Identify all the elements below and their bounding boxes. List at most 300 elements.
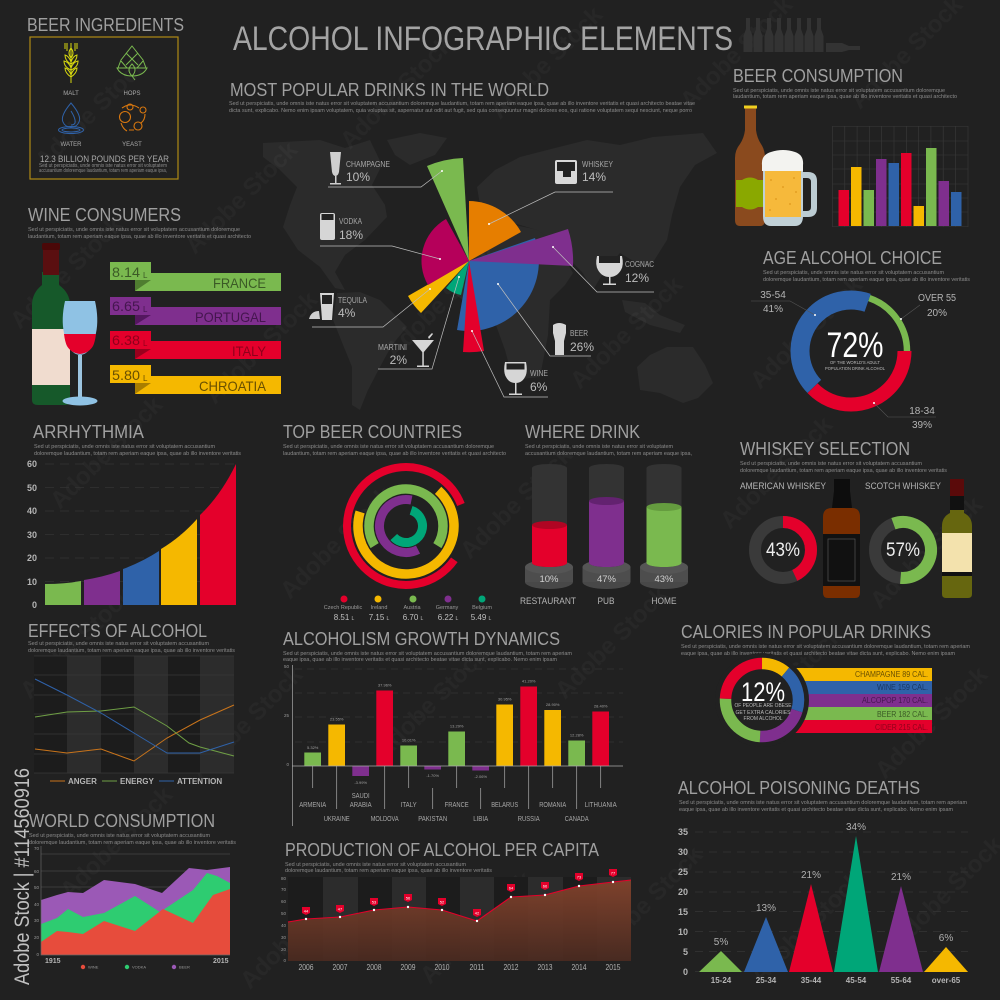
faint stock watermark pattern: Adobe Stock — [335, 31, 458, 154]
body text: Sed ut perspiciatis, unde omnis iste natus error sit voluptatem — [39, 163, 167, 169]
ribbon: france: 8.14 — [112, 264, 140, 280]
area chart: 70 — [281, 887, 286, 892]
donut chart — [779, 279, 923, 423]
heading: calories: CALORIES IN POPULAR DRINKS — [681, 622, 931, 642]
faint stock watermark pattern: Adobe Stock — [55, 781, 178, 904]
area chart: 44 — [304, 908, 309, 914]
label: martini — [378, 343, 407, 367]
icon: bottle silhouettes — [744, 18, 860, 52]
triangle chart: 15 — [678, 907, 688, 917]
icon: beer bottle — [735, 106, 765, 226]
ribbon: chroatia: CHROATIA — [199, 378, 267, 394]
bar chart: -3.99% — [354, 780, 367, 785]
bar chart: 23.55% — [330, 716, 344, 722]
bar chart: ARMENIA — [299, 800, 326, 809]
triangle chart: 45-54 — [846, 976, 867, 985]
faint stock watermark pattern: Adobe Stock — [725, 621, 848, 744]
area chart: 60 — [281, 899, 286, 904]
body text: Sed ut perspiciatis, unde omnis iste natus error sit voluptatem accusantium doloremque laudantium, totam rem aperiam — [679, 800, 967, 806]
icon: beer mug — [762, 150, 817, 226]
faint stock watermark pattern: Adobe Stock — [745, 866, 868, 989]
panel: age alcohol choice — [751, 248, 970, 431]
body text: Sed ut perspiciatis, unde omnis iste natus error sit voluptatem accusantium — [763, 270, 944, 276]
icon: water drop — [58, 103, 84, 134]
triangle chart: 55-64 — [891, 976, 912, 985]
bar chart: PAKISTAN — [418, 814, 447, 823]
ribbon: italy: 6.38 — [112, 332, 140, 348]
cylinder: home: HOME — [652, 596, 676, 606]
bar chart: -1.70% — [426, 773, 439, 778]
faint stock watermark pattern: Adobe Stock — [415, 866, 538, 989]
legend: WINE — [88, 964, 99, 970]
icon: martini — [412, 333, 434, 367]
area chart: 56 — [406, 896, 411, 900]
triangle chart: 5 — [683, 947, 688, 957]
icon: beer glass — [553, 323, 566, 355]
label: whiskey — [582, 160, 614, 184]
area chart: 2012 — [504, 963, 519, 972]
chart: curved bars — [45, 464, 236, 605]
area chart: 50 — [281, 911, 286, 916]
body text: Sed ut perspiciatis, unde omnis iste natus error sit voluptatem accusantium — [28, 641, 209, 647]
body text: dicta sunt, explicabo. Nemo enim ipsam voluptatem, quia voluptas sit, aspernatur aut odit aut fugit, sed quia consequuntur magni dolores eos, qui ratione voluptatem sequi nesciunt, neque porro — [229, 108, 692, 114]
body text: Sed ut perspiciatis, unde omnis iste natus error sit voluptatem accusantium doloremque laudantium, totam rem aperiam eaque ipsa, quae ab illo inventore veritatis et quasi architecto beatae vitae — [229, 101, 695, 107]
icon: tequila — [309, 293, 334, 320]
panel: world consumption — [29, 811, 236, 970]
donut: american whiskey — [755, 522, 811, 578]
label: wine — [530, 369, 548, 394]
faint stock watermark pattern: Adobe Stock — [200, 286, 323, 409]
faint stock watermark pattern: Adobe Stock — [235, 871, 358, 994]
bar chart: 12.28% — [570, 732, 584, 738]
triangle chart: 20 — [678, 887, 688, 897]
triangle chart: over-65 — [932, 976, 961, 985]
triangle chart: 10 — [678, 927, 688, 937]
icon: champagne — [330, 152, 341, 184]
legend: austria: Austria — [403, 605, 421, 611]
area chart: 2014 — [572, 963, 587, 972]
heading: where drink: WHERE DRINK — [525, 422, 640, 442]
label: over 55: 20% — [927, 308, 947, 319]
label: american whiskey: AMERICAN WHISKEY — [740, 481, 826, 491]
caption: POPULATION DRINK ALCOHOL — [825, 366, 885, 371]
faint stock watermark pattern: Adobe Stock — [565, 271, 688, 394]
body text: Sed ut perspiciatis, unde omnis iste natus error sit voluptatem accusantium — [34, 444, 215, 450]
label: whiskey: 14% — [582, 170, 606, 184]
icon: wine glass — [62, 301, 98, 406]
ribbon: chroatia — [110, 365, 281, 394]
bar chart: RUSSIA — [518, 814, 540, 823]
faint stock watermark pattern: Adobe Stock — [185, 661, 308, 784]
body text: eaque ipsa, quae ab illo inventore veritatis et quasi architecto beatae vitae dicta sunt, explicabo. Nemo enim ipsam — [681, 651, 955, 657]
body text: Sed ut perspiciatis, unde omnis iste natus error sit voluptatem accusantium — [740, 461, 922, 467]
y axis labels: 0 — [32, 600, 37, 610]
body text: Sed ut perspiciatis, unde omnis iste natus error sit voluptatem — [525, 444, 673, 450]
faint stock watermark pattern: Adobe Stock — [870, 661, 993, 784]
legend: VODKA — [132, 964, 146, 970]
area chart — [281, 869, 631, 972]
legend: austria: 6.70 L — [403, 613, 424, 622]
bar chart: 5.32% — [307, 745, 319, 750]
calorie bars: CHAMPAGNE 89 CAL. — [855, 669, 928, 679]
y axis labels: 40 — [27, 506, 37, 516]
label: hops: HOPS — [123, 91, 141, 97]
bar chart: UKRAINE — [324, 814, 350, 823]
center stat: 12% — [741, 677, 785, 707]
legend — [81, 964, 190, 970]
triangle chart: 25 — [678, 867, 688, 877]
stacked area chart: 70 — [34, 846, 39, 851]
label: water: WATER — [60, 142, 82, 148]
donut chart — [711, 649, 813, 751]
label: beer — [570, 329, 594, 354]
panel: arrhythmia — [27, 422, 241, 610]
center stat: 72% — [826, 326, 884, 365]
area chart: 20 — [281, 947, 286, 952]
stacked area chart: 2015 — [213, 958, 229, 965]
stacked area chart: 30 — [34, 918, 39, 923]
bar chart: -2.06% — [474, 774, 487, 779]
label: cognac: COGNAC — [625, 260, 654, 269]
area chart: 2013 — [538, 963, 553, 972]
body text: Sed ut perspiciatis, unde omnis iste natus error sit voluptatem accusantium doloremque laudantium, totam rem aperiam — [681, 644, 970, 650]
triangle chart: 25-34 — [756, 976, 777, 985]
donut: scotch whiskey: 57% — [886, 540, 920, 561]
triangle chart — [678, 822, 968, 985]
label: vodka — [339, 217, 363, 242]
label: champagne: 10% — [346, 170, 370, 184]
faint stock watermark pattern: Adobe Stock — [370, 641, 493, 764]
area chart: 47 — [338, 906, 343, 912]
faint stock watermark pattern: Adobe Stock — [180, 136, 303, 259]
body text: doloremque laudantium, totam rem aperiam eaque ipsa, quae ab illo inventore veritatis — [740, 468, 947, 474]
donut: american whiskey: 43% — [766, 540, 800, 561]
area chart: 53 — [372, 900, 377, 904]
ribbon: italy: L — [143, 339, 148, 348]
label: 18-34: 39% — [912, 420, 932, 431]
icon: vodka — [320, 213, 335, 240]
bar chart: 30.95% — [498, 696, 512, 702]
area chart: 52 — [440, 900, 445, 904]
heading: top beer countries: TOP BEER COUNTRIES — [283, 422, 462, 442]
triangle chart: 13% — [756, 903, 776, 914]
legend: ENERGY — [120, 777, 154, 786]
body text: eaque ipsa, quae ab illo inventore veritatis et quasi architecto beatae vitae dicta sunt, explicabo. Nemo enim ipsam — [679, 807, 953, 813]
label: beer: BEER — [570, 329, 588, 338]
label: tequila: TEQUILA — [338, 296, 368, 305]
triangle chart: 21% — [801, 870, 821, 881]
cylinder: home — [640, 464, 688, 606]
bar chart: 28.40% — [594, 704, 608, 708]
icon: wine bottle — [32, 243, 70, 405]
label: wine: WINE — [530, 369, 548, 378]
y axis labels: 60 — [27, 459, 37, 469]
heading: production per capita: PRODUCTION OF ALCOHOL PER CAPITA — [285, 840, 599, 860]
rose chart — [408, 158, 573, 352]
bar chart: LITHUANIA — [585, 800, 617, 809]
stacked area chart: 1915 — [45, 958, 61, 965]
label: 18-34: 18-34 — [909, 406, 935, 417]
radial rings — [324, 444, 488, 608]
faint stock watermark pattern: Adobe Stock — [45, 391, 168, 514]
panel: where drink — [520, 422, 692, 606]
stacked area chart: 20 — [34, 935, 39, 940]
stat: billion pounds: 12.3 BILLION POUNDS PER YEAR — [40, 154, 169, 164]
icon: yeast — [120, 104, 146, 131]
ribbon: portugal: PORTUGAL — [195, 309, 266, 325]
bar chart: CANADA — [565, 814, 589, 823]
body text: Sed ut perspiciatis, unde omnis iste natus error sit voluptatem accusantium — [285, 862, 466, 868]
faint stock watermark pattern: Adobe Stock — [455, 441, 578, 564]
callout lines — [751, 301, 936, 417]
faint stock watermark pattern: Adobe Stock — [275, 481, 398, 604]
stacked area chart: 50 — [34, 885, 39, 890]
area chart: 2007 — [332, 963, 348, 972]
cylinder: pub — [582, 464, 630, 606]
legend: germany: Germany — [436, 605, 459, 611]
panel: alcoholism growth dynamics — [283, 629, 623, 826]
stacked area chart — [34, 846, 230, 965]
world map — [263, 133, 717, 410]
calorie bars: BEER 182 CAL. — [877, 709, 928, 719]
label: martini: 2% — [390, 353, 407, 367]
bar chart: ARABIA — [350, 800, 372, 809]
y axis labels: 20 — [27, 553, 37, 563]
leader lines — [312, 170, 654, 397]
heading: beer consumption: BEER CONSUMPTION — [733, 66, 903, 86]
heading: whiskey selection: WHISKEY SELECTION — [740, 439, 910, 459]
triangle chart: 30 — [678, 847, 688, 857]
faint stock watermark pattern: Adobe Stock — [30, 51, 153, 174]
label: wine: 6% — [530, 380, 548, 394]
label: beer: 26% — [570, 340, 594, 354]
triangle chart: 0 — [683, 967, 688, 977]
legend: BEER — [179, 964, 190, 970]
bar chart: 0 — [286, 762, 289, 767]
icon: american whiskey bottle — [823, 479, 860, 598]
label: 35-54: 35-54 — [760, 290, 786, 301]
label: whiskey: WHISKEY — [582, 160, 614, 169]
area chart: 2010 — [434, 963, 450, 972]
heading: growth dynamics: ALCOHOLISM GROWTH DYNAMICS — [283, 629, 560, 649]
ribbon: france: L — [143, 271, 148, 280]
caption: FROM ALCOHOL — [744, 716, 783, 722]
body text: eaque ipsa, quae ab illo inventore veritatis et quasi architecto beatae vitae dicta sunt, explicabo. Nemo enim ipsam — [283, 657, 557, 663]
area chart: 30 — [281, 935, 286, 940]
legend: belgium: 5.49 L — [471, 613, 492, 622]
body text: Sed ut perspiciatis, unde omnis iste natus error sit voluptatem accusantium doloremque — [283, 444, 494, 450]
body text: doloremque laudantium, totam rem aperiam eaque ipsa, quae ab illo inventore veritatis — [34, 451, 241, 457]
label: over 55: OVER 55 — [918, 293, 956, 304]
cylinder: restaurant: 10% — [539, 574, 559, 585]
calorie bars — [780, 668, 932, 733]
calorie bars: CIDER 215 CAL. — [875, 722, 928, 732]
cylinder: pub: PUB — [598, 596, 614, 606]
cylinder: pub: 47% — [597, 574, 617, 585]
calorie bars: ALCOPOP 170 CAL. — [862, 695, 928, 705]
body text: Sed ut perspiciatis, unde omnis iste natus error sit voluptatem accusantium — [29, 833, 210, 839]
heading: wine consumers: WINE CONSUMERS — [28, 205, 181, 225]
label: vodka: VODKA — [339, 217, 363, 226]
label: 35-54: 41% — [763, 304, 783, 315]
bar chart: FRANCE — [445, 800, 469, 809]
stacked area chart: 0 — [36, 952, 39, 957]
label: 35-54 — [760, 290, 786, 315]
panel: beer ingredients — [27, 15, 184, 179]
body text: Sed ut perspiciatis, unde omnis iste natus error sit voluptatem accusantium doloremque — [28, 227, 240, 233]
legend: belgium — [471, 596, 492, 622]
y axis labels: 30 — [27, 530, 37, 540]
y axis labels: 50 — [27, 483, 37, 493]
body text: doloremque laudantium, totam rem aperiam eaque ipsa, quae ab illo inventore veritatis — [28, 648, 235, 654]
heading: age alcohol choice: AGE ALCOHOL CHOICE — [763, 248, 942, 268]
faint stock watermark pattern: Adobe Stock — [15, 581, 138, 704]
label: over 55 — [918, 293, 956, 319]
panel: whiskey selection — [740, 439, 972, 598]
bar chart: MOLDOVA — [371, 814, 399, 823]
ribbon: portugal — [110, 297, 281, 325]
bar chart: ROMANIA — [539, 800, 566, 809]
heading: effects of alcohol: EFFECTS OF ALCOHOL — [28, 621, 207, 641]
faint stock watermark pattern: Adobe Stock — [485, 1, 608, 124]
bar chart: 41.20% — [522, 678, 536, 684]
legend: ireland: Ireland — [371, 605, 387, 611]
bar chart: SAUDI — [352, 791, 370, 800]
label: scotch whiskey: SCOTCH WHISKEY — [865, 481, 941, 491]
area chart: 2011 — [470, 963, 485, 972]
triangle chart: 5% — [714, 937, 728, 948]
label: 18-34 — [909, 406, 935, 431]
line chart — [34, 656, 234, 773]
panel: effects of alcohol — [28, 621, 235, 786]
label: cognac — [625, 260, 654, 285]
panel: production per capita — [281, 840, 631, 972]
heading: arrhythmia: ARRHYTHMIA — [33, 422, 144, 442]
body text: laudantium, totam rem aperiam eaque ipsa, quae ab illo inventore veritatis et quasi architecto — [28, 234, 251, 240]
icon: cognac — [596, 256, 623, 285]
stock id watermark: Adobe Stock | #114560916 — [11, 768, 34, 985]
label: vodka: 18% — [339, 228, 363, 242]
legend: ANGER — [68, 777, 97, 786]
bar chart: 10.01% — [402, 738, 416, 742]
body text: Sed ut perspiciatis, unde omnis iste natus error sit voluptatem accusantium doloremque — [733, 88, 945, 94]
y axis labels: 10 — [27, 577, 37, 587]
body text: doloremque laudantium, totam rem aperiam eaque ipsa, quae ab illo inventore veritatis — [285, 868, 492, 874]
bar chart: LIBIA — [473, 814, 488, 823]
main title: ALCOHOL INFOGRAPHIC ELEMENTS — [233, 20, 733, 58]
stacked area chart: 60 — [34, 869, 39, 874]
area chart: 42 — [475, 910, 480, 916]
heading: poisoning deaths: ALCOHOL POISONING DEATHS — [678, 778, 920, 798]
legend: ATTENTION — [177, 777, 222, 786]
y axis labels — [27, 459, 37, 610]
legend: czech republic: Czech Republic — [324, 605, 363, 611]
triangle chart: 21% — [891, 872, 911, 883]
ribbon: italy: ITALY — [232, 343, 267, 359]
panel: beer consumption — [733, 66, 968, 227]
area chart: 0 — [283, 958, 286, 963]
body text: doloremque laudantium, totam rem aperiam eaque ipsa, quae ab illo inventore veritatis — [29, 840, 236, 846]
ingredients frame — [30, 37, 178, 179]
body text: laudantium, totam rem aperiam eaque ipsa, quae ab illo inventore veritatis et quasi architecto — [733, 94, 957, 100]
legend: ireland: 7.15 L — [369, 613, 390, 622]
ribbon: portugal: L — [143, 305, 148, 314]
triangle chart: 15-24 — [711, 976, 732, 985]
heading: world consumption: WORLD CONSUMPTION — [29, 811, 215, 831]
icon: malt — [64, 43, 78, 83]
label: champagne — [346, 160, 390, 184]
ribbon: chroatia: 5.80 — [112, 367, 140, 383]
label: tequila — [338, 296, 368, 320]
bar chart — [284, 664, 623, 826]
legend: germany: 6.22 L — [438, 613, 459, 622]
heading: most popular drinks: MOST POPULAR DRINKS IN THE WORLD — [230, 80, 549, 100]
ribbon: italy — [110, 331, 281, 359]
area chart: 77 — [611, 870, 616, 876]
triangle chart: 35 — [678, 827, 688, 837]
faint stock watermark pattern: Adobe Stock — [745, 271, 868, 394]
bar chart: 13.29% — [450, 724, 464, 728]
panel: top beer countries — [283, 422, 506, 622]
donut: scotch whiskey — [867, 514, 939, 586]
label: tequila: 4% — [338, 306, 356, 320]
legend: ireland — [369, 596, 390, 622]
icon: hops — [117, 46, 147, 80]
faint stock watermark pattern: Adobe Stock — [715, 411, 838, 534]
body text: Sed ut perspiciatis, unde omnis iste natus error sit voluptatem accusantium doloremque laudantium, totam rem aperiam — [283, 651, 572, 657]
ribbon: portugal: 6.65 — [112, 298, 140, 314]
stacked area chart: 40 — [34, 902, 39, 907]
caption: GET EXTRA CALORIES — [736, 710, 791, 716]
ribbon: france — [110, 262, 281, 291]
area chart: 73 — [577, 874, 582, 880]
triangle chart: 35-44 — [801, 976, 822, 985]
legend: austria — [403, 596, 424, 622]
body text: laudantium, totam rem aperiam eaque ipsa, quae ab illo inventore veritatis et quasi architecto — [283, 451, 506, 457]
bar chart: ITALY — [401, 800, 417, 809]
label: martini: MARTINI — [378, 343, 407, 352]
area chart: 2008 — [366, 963, 382, 972]
heading: beer ingredients: BEER INGREDIENTS — [27, 15, 184, 35]
label: malt: MALT — [63, 91, 79, 97]
area chart: 66 — [543, 884, 548, 888]
triangle chart: 6% — [939, 933, 953, 944]
bar chart: 37.96% — [378, 682, 392, 688]
faint stock watermark pattern: Adobe Stock — [5, 211, 128, 334]
faint stock watermark pattern: Adobe Stock — [585, 841, 708, 964]
body text: doloremque laudantium, totam rem aperiam eaque ipsa, quae ab illo inventore veritatis — [763, 277, 970, 283]
icon: whiskey — [555, 160, 577, 184]
label: champagne: CHAMPAGNE — [346, 160, 390, 169]
faint stock watermark pattern: Adobe Stock — [380, 241, 503, 364]
bar chart: beer consumption — [832, 126, 968, 227]
area chart: 80 — [281, 876, 286, 881]
panel: alcohol poisoning deaths — [678, 778, 968, 985]
bar chart: BELARUS — [491, 800, 518, 809]
panel: calories in popular drinks — [681, 622, 970, 751]
legend: belgium: Belgium — [472, 605, 492, 611]
bar chart: 50 — [284, 664, 289, 669]
icon: scotch bottle — [942, 479, 972, 598]
label: cognac: 12% — [625, 271, 649, 285]
faint stock watermark pattern: Adobe Stock — [550, 581, 673, 704]
cylinder: home: 43% — [654, 574, 674, 585]
caption: OF THE WORLD'S ADULT — [830, 360, 880, 365]
area chart: 2009 — [400, 963, 416, 972]
body text: accusantium doloremque laudantium, totam rem aperiam eaque ipsa, — [39, 168, 167, 174]
faint stock watermark pattern: Adobe Stock — [865, 491, 988, 614]
panel: most popular drinks — [229, 80, 695, 397]
